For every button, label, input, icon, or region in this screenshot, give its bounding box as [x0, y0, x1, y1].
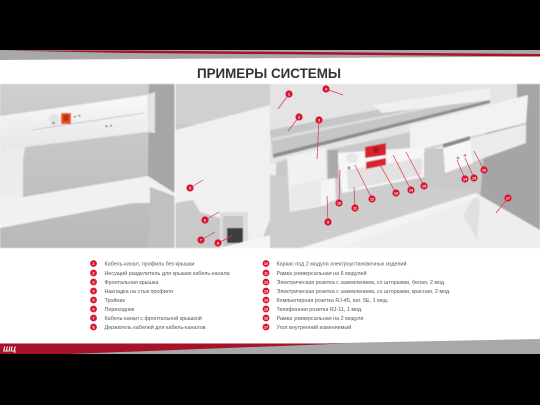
legend: right column: 15 — [264, 307, 268, 311]
legend: right column: 10 — [264, 262, 268, 266]
legend: right column — [263, 260, 451, 331]
legend: right column: Электрическая розетка с заземлением, со шторками, белая, 2 мод. — [276, 280, 446, 286]
bottom grey and red band — [0, 339, 540, 354]
photo markers: 10 — [337, 201, 341, 205]
photo markers: 13 — [394, 191, 398, 195]
white socket — [346, 153, 358, 163]
photo markers: 16 — [482, 168, 486, 172]
legend: left column: 7 — [92, 316, 94, 320]
photo markers: 15 — [472, 176, 476, 180]
legend: right column: Рамка универсальная на 6 модулей — [276, 270, 367, 277]
photo markers: 1 — [288, 92, 290, 96]
legend: right column: Электрическая розетка с заземлением, со шторками, красная, 2 мод. — [276, 289, 451, 295]
title: ПРИМЕРЫ СИСТЕМЫ — [197, 66, 341, 81]
photo markers: 3 — [318, 118, 320, 122]
legend: right column: 17 — [264, 325, 268, 329]
bottom black bar — [0, 354, 540, 405]
photo markers: 7 — [200, 238, 202, 242]
photo markers — [186, 85, 512, 247]
cable box window — [220, 212, 248, 247]
upper channel — [0, 92, 155, 151]
photo: left cable channel loop — [0, 84, 174, 248]
legend: left column: Переходник — [104, 307, 135, 313]
legend: right column: 11 — [264, 271, 268, 275]
small cover — [321, 178, 336, 205]
floor corner channel — [300, 193, 540, 248]
legend: left column — [90, 260, 230, 331]
legend: right column: Рамка универсальная на 2 модуля — [276, 316, 364, 322]
right frame — [443, 137, 473, 173]
legend: right column: 14 — [264, 298, 268, 302]
legend: left column: Кабель-канал с фронтальной крышкой — [104, 315, 202, 322]
legend: right column: Угол внутренний изменяемый — [276, 324, 351, 331]
photo markers: 4 — [325, 87, 327, 91]
legend: left column: 8 — [92, 325, 94, 329]
data ports — [74, 115, 112, 127]
legend: left column: 6 — [92, 307, 94, 311]
legend: left column: Тройник — [104, 297, 125, 304]
tee piece — [176, 104, 276, 248]
socket: white outlet — [49, 114, 59, 126]
legend: left column: 3 — [92, 280, 94, 284]
red sockets — [365, 143, 386, 158]
photo markers: 15 — [422, 184, 426, 188]
legend: right column: 13 — [264, 289, 268, 293]
left front covers — [287, 148, 328, 212]
upper channel rail — [270, 84, 517, 165]
photo markers: 9 — [327, 220, 329, 224]
legend: left column: Держатель кабелей для кабель-каналов — [104, 324, 206, 331]
legend: left column: Несущий разделитель для крышек кабель-канала — [104, 270, 230, 277]
photo markers: 8 — [217, 241, 219, 245]
top grey and red band — [0, 50, 540, 60]
leader lines — [190, 89, 508, 243]
legend: right column: 16 — [264, 316, 268, 320]
photo: system details — [176, 84, 540, 248]
legend: left column: 4 — [92, 289, 94, 293]
legend: left column: 1 — [92, 262, 94, 266]
center frame — [337, 147, 424, 193]
left riser — [0, 147, 25, 204]
legend: left column: Кабель-канал, профиль без крышки — [104, 262, 194, 268]
legend: left column: 5 — [92, 298, 94, 302]
logo: ШЦ — [3, 344, 16, 354]
photo markers: 6 — [204, 218, 206, 222]
legend: right column: Компьютерная розетка RJ-45, кат. 5Е, 1 мод. — [276, 298, 388, 304]
legend: left column: Фронтальная крышка — [104, 280, 158, 286]
legend: right column: 12 — [264, 280, 268, 284]
legend: left column: 2 — [92, 271, 94, 275]
photo markers: 14 — [409, 188, 413, 192]
legend: left column: Накладка на стык профиля — [104, 289, 173, 295]
top black bar — [0, 0, 540, 50]
legend: right column: Телефонная розетка RJ-11, 1 мод. — [276, 307, 363, 313]
socket: red outlet — [61, 113, 71, 124]
photo markers: 14 — [463, 177, 467, 181]
right front covers — [410, 95, 528, 152]
photo markers: 2 — [298, 115, 300, 119]
lower channel and corner — [0, 176, 174, 228]
photo markers: 17 — [506, 196, 510, 200]
callouts on photo — [186, 85, 512, 247]
photo markers: 12 — [370, 197, 374, 201]
legend: right column: Каркас под 2 модуля электроустановочных изделий — [276, 260, 406, 268]
photo markers: 5 — [189, 186, 191, 190]
photo markers: 11 — [353, 206, 357, 210]
